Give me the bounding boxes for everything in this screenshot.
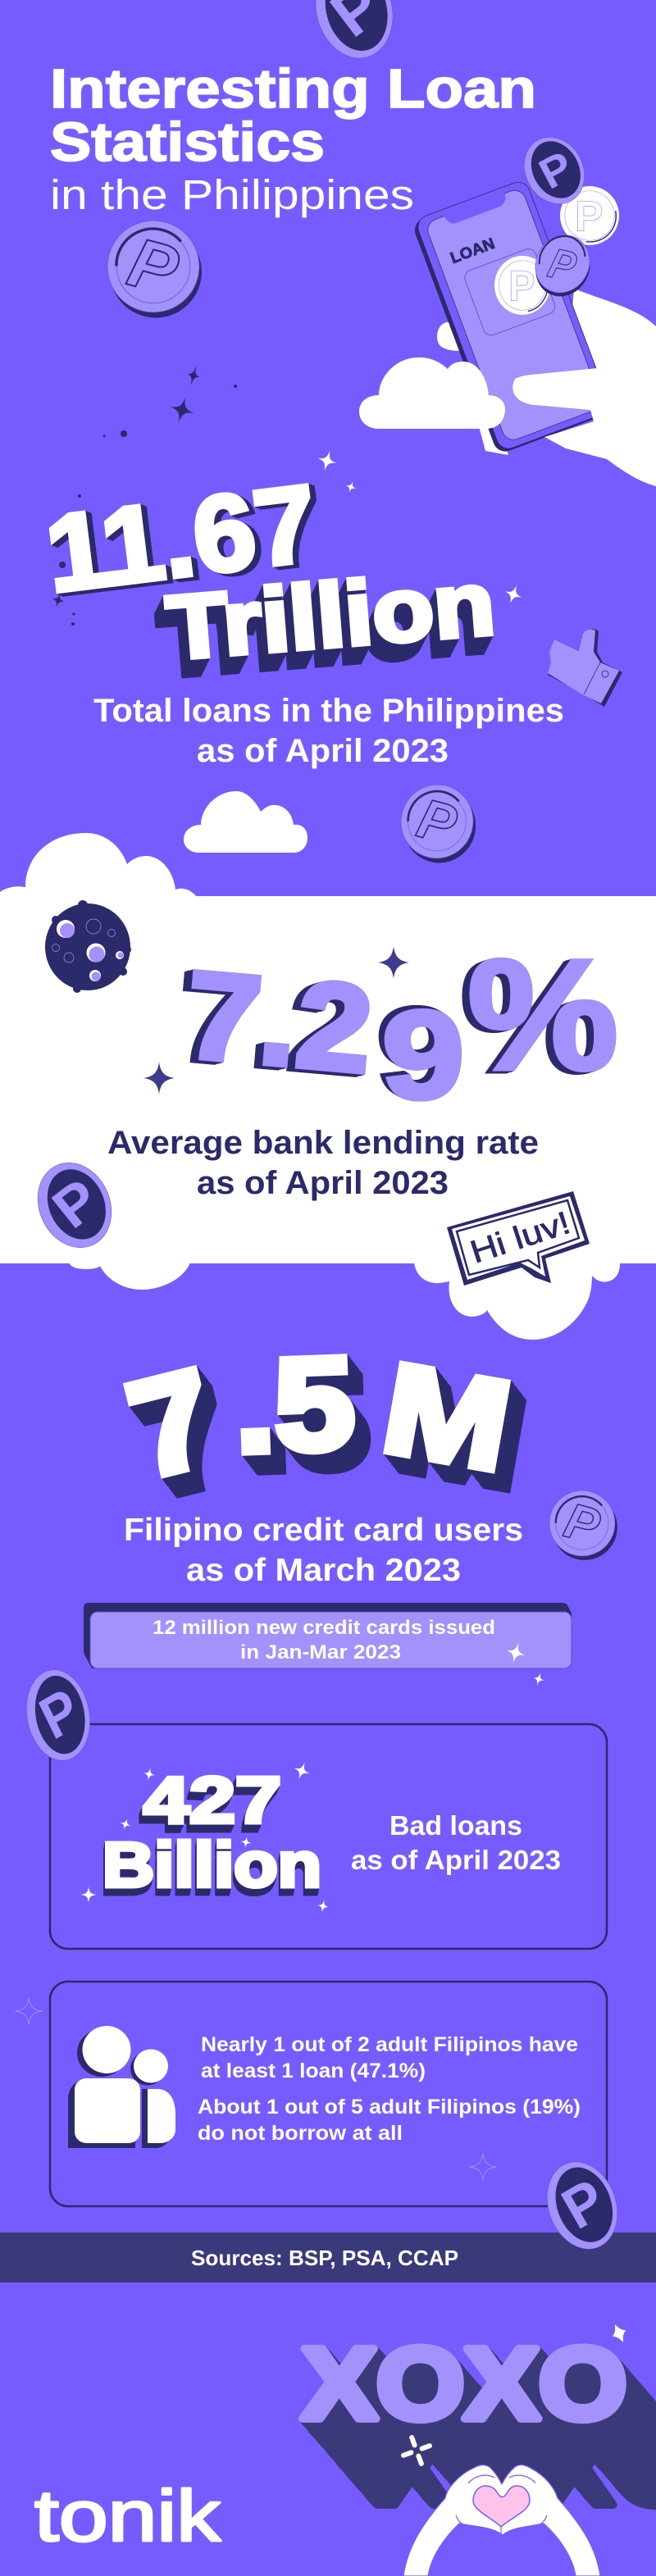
caption: total loans: as of April 2023 [197,733,449,769]
sparkles: around 427 Billion [80,1759,330,1914]
coin: top partly cropped [305,0,403,67]
title: Interesting Loan [50,58,536,120]
coin: white band [25,1151,125,1259]
caption: credit card users [124,1513,523,1588]
stat: 11.67 Trillion [39,462,499,679]
caption: bad loans: as of April 2023 [351,1845,561,1875]
stars and dots: header [103,363,237,438]
coin: large left: P [121,223,186,311]
sparkle: above XOXO [608,2321,630,2346]
caption: bad loans: Bad loans [390,1810,522,1841]
coin: right of caption [541,1483,626,1568]
caption: lending rate [107,1125,539,1201]
callout: 12 million new credit cards: in Jan-Mar 2023 [240,1641,401,1663]
stat: 7.29% [180,926,618,1125]
stat: 7.5M: .5 [232,1329,357,1480]
caption: total loans [93,693,564,769]
icon: planet [45,900,131,993]
coin: bottom right [535,2152,629,2259]
stat: 7.29%: 9 [382,985,464,1125]
band: sources: Sources: BSP, PSA, CCAP [191,2246,458,2270]
small coin: P [544,240,581,290]
coin: large left [96,210,213,328]
text: borrower stats: at least 1 loan (47.1%) [201,2059,426,2082]
sparkle: top of 11.67 [315,448,339,474]
stat: 11.67 Trillion: Trillion [163,553,499,679]
title: Statistics [50,112,325,173]
stat: 11.67 Trillion: 11.67 [39,462,323,615]
white coin on screen: P [508,262,535,310]
coin: upper left of bad loans panel: P [30,1676,89,1752]
text: borrower stats [198,2033,581,2145]
panel: borrowers [50,1982,607,2206]
coin: bottom right: P [551,2166,616,2241]
text: borrower stats: do not borrow at all [198,2122,403,2145]
speech bubble: Hi luv!: Hi luv! [466,1205,575,1271]
icon: heart hands [403,2465,600,2576]
stat: 7.29%: % [467,926,618,1103]
title [50,58,536,218]
band: sources [0,2232,656,2282]
hand [512,365,656,486]
phone body [411,179,613,455]
coin: upper left of bad loans panel [20,1664,97,1766]
white coin on screen [494,256,550,315]
coin: middle [392,776,485,871]
dark coin top right: P [531,143,581,198]
coin: middle: P [411,787,463,857]
caption: lending rate: Average bank lending rate [107,1125,539,1161]
illustration: phone held in hand with coins [411,126,656,486]
title: in the Philippines [50,171,414,218]
sparkle: pills [395,2429,438,2472]
callout: 12 million new credit cards: 12 million new credit cards issued [153,1617,495,1639]
caption: bad loans [351,1810,561,1875]
caption: credit card users: Filipino credit card users [124,1513,523,1548]
text: borrower stats: About 1 out of 5 adult Filipinos (19%) [198,2096,581,2119]
stat: 7.5M [116,1329,521,1506]
icon: thumbs up [548,629,622,707]
panel: bad loans [50,1724,607,1949]
phone body: LOAN [449,235,497,267]
coin: right of caption: P [559,1492,606,1554]
white coin top right [560,186,619,245]
cloud: middle [184,791,308,853]
sparkles and dots around 11.67 [50,480,525,626]
caption: total loans: Total loans in the Philippines [93,693,564,729]
cloud: header [359,357,505,429]
sparkle: below callout [531,1671,546,1687]
callout: 12 million new credit cards [84,1603,572,1668]
dark coin top right [512,126,596,215]
text: borrower stats: Nearly 1 out of 2 adult Filipinos have [201,2033,578,2056]
caption: lending rate: as of April 2023 [197,1165,449,1201]
stat: 7.5M: M [373,1336,521,1499]
outline stars [15,1997,497,2181]
small coin [523,225,602,307]
caption: credit card users: as of March 2023 [186,1553,461,1588]
icon: adult and child [68,2026,175,2148]
white coin top right: P [575,193,604,240]
stars: 7.29 accents [144,946,409,1094]
panel: white band with lending rate [0,833,656,1340]
stat: 7.29%: 7.2 [180,945,377,1099]
XOXO with long shadow: XOXO [302,2328,626,2441]
stat: 7.5M: 7 [116,1340,229,1506]
speech bubble: Hi luv! [447,1191,590,1286]
stat: 427: 427 [144,1764,281,1836]
stat: Billion: Billion [102,1830,321,1900]
logo: tonik: tonik [34,2475,221,2556]
coin: white band: P [40,1167,112,1240]
